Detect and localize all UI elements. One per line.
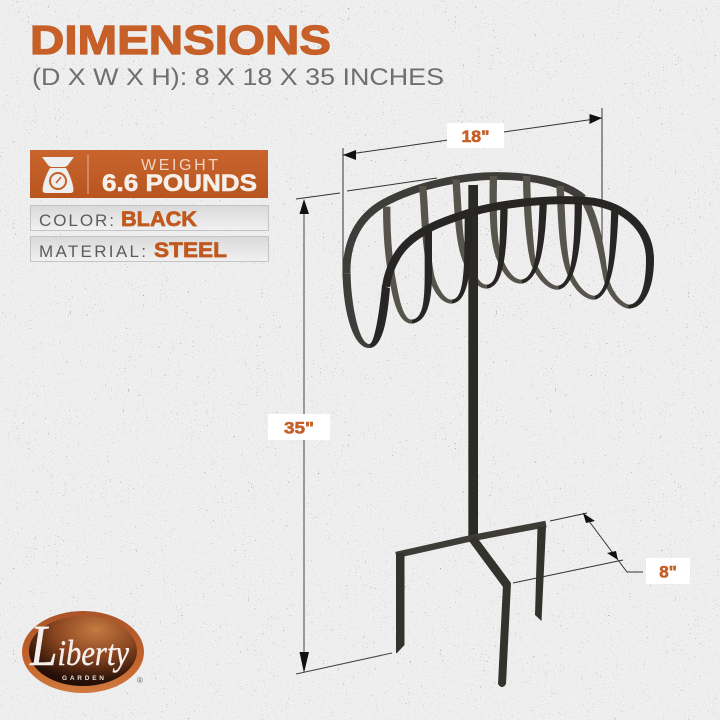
logo script wordmark: Liberty [29,613,129,678]
hose hanger basket [343,176,654,540]
dimension: extension lines behind product [296,108,602,278]
label: 8 inches: 8" [659,562,677,582]
weight label: WEIGHT [141,157,218,174]
front straps [412,200,619,324]
product: hose stand [343,176,654,687]
icon: kitchen scale [42,157,74,193]
subtitle: overall dimensions: (D X W X H): 8 X 18 X 35 INCHES [32,64,444,91]
rear straps [383,176,629,324]
color value: BLACK [121,207,197,231]
weight value: 6.6 POUNDS [102,170,257,197]
centre pole [468,185,478,540]
panel: weight [30,150,268,198]
front rim [369,200,654,348]
logo subtext: GARDEN [62,675,104,682]
dimension: depth 8 inches [513,513,690,584]
material label: MATERIAL: [39,242,146,261]
registered mark: ® [137,676,143,685]
title: DIMENSIONS [30,17,331,63]
rear rim [343,176,583,348]
label: 18 inches: 18" [462,127,490,146]
panel: color [30,206,268,231]
dimension: height 35 inches [268,199,392,674]
material value: STEEL [154,238,227,262]
three-leg base [396,524,546,687]
logo: Liberty Garden [22,611,144,693]
panel: material [30,236,268,262]
color label: COLOR: [39,211,114,230]
dimension: width 18 inches [343,114,602,160]
label: 35 inches: 35" [284,418,314,438]
